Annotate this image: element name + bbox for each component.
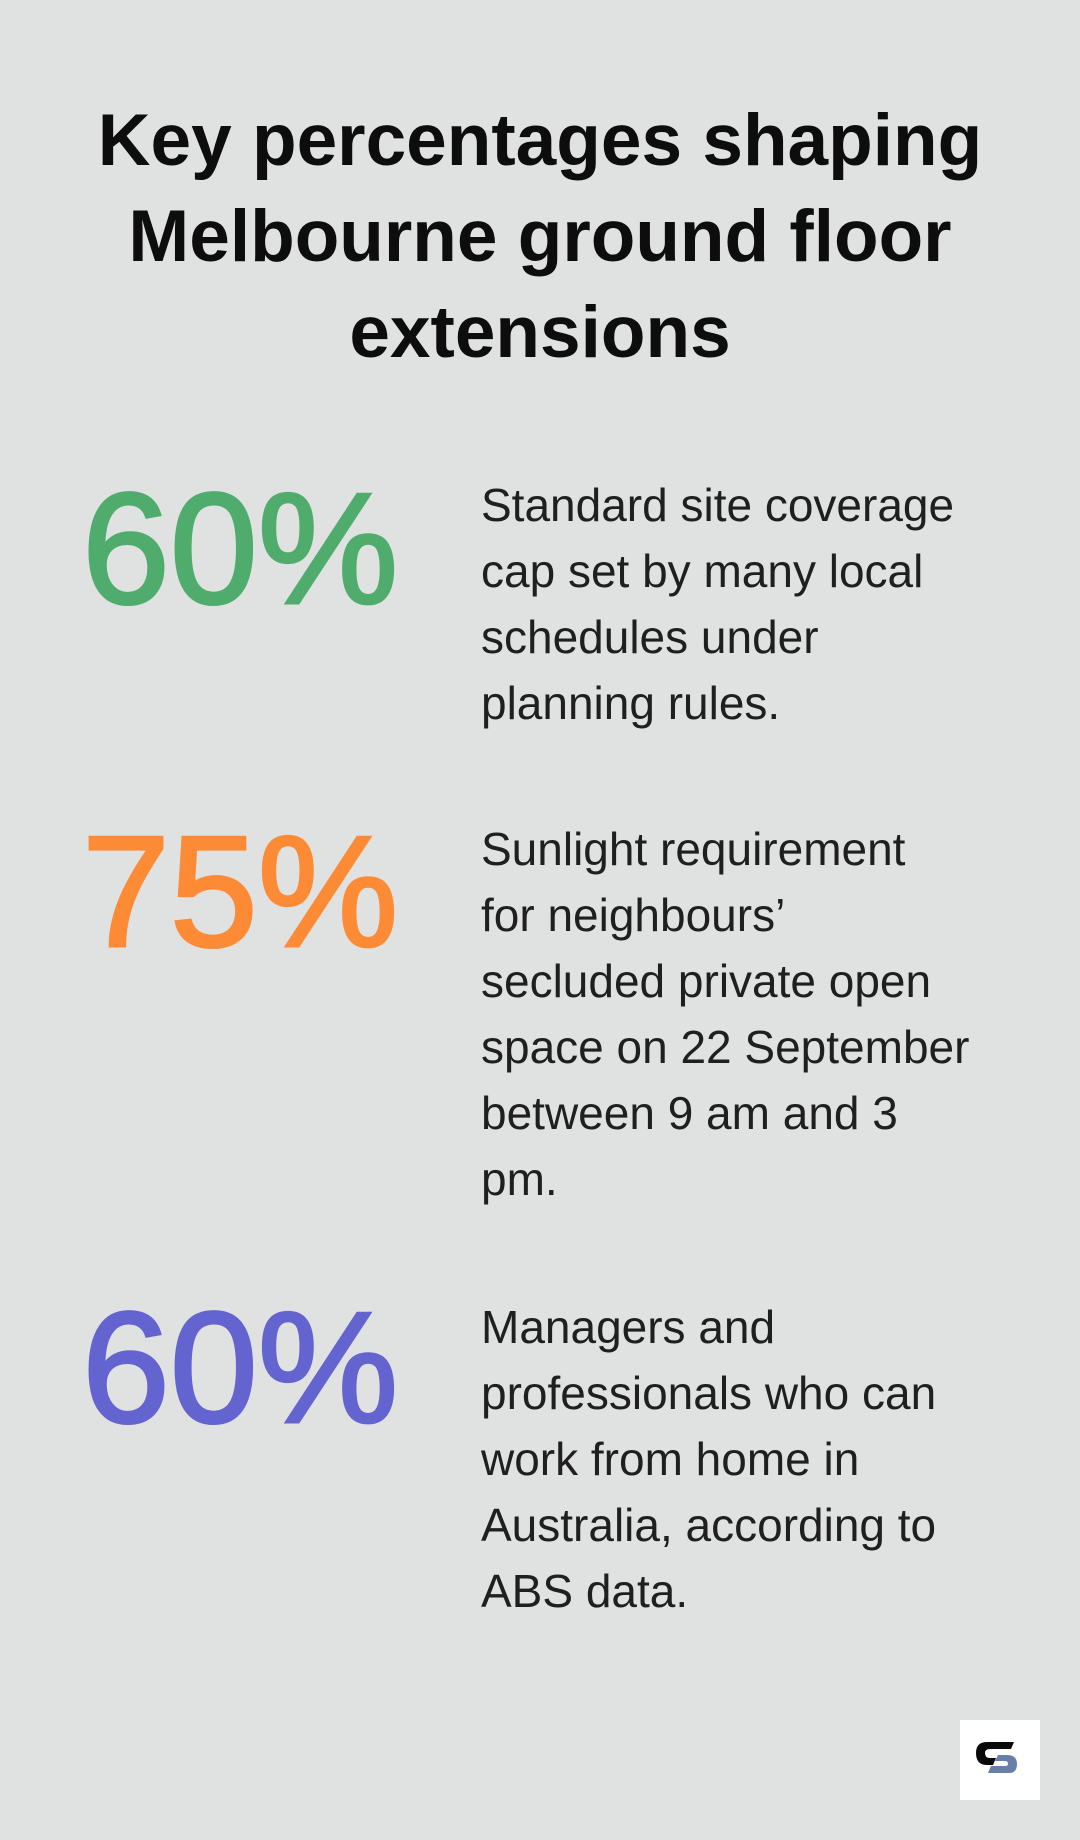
stat 2 text: for neighbours’ [481,889,785,941]
logo [960,1720,1040,1800]
stat 2 text: secluded private open [481,955,931,1007]
stat 1 text: schedules under [481,611,819,663]
stat 3 text [481,1301,936,1617]
stat 3 text: professionals who can [481,1367,936,1419]
stat 1 text: Standard site coverage [481,479,954,531]
stat 2 text: Sunlight requirement [481,823,905,875]
stat 3 text: Australia, according to [481,1499,936,1551]
stat 2 text: pm. [481,1153,558,1205]
stat 3 number: 60% [82,1280,398,1456]
stat 3 text: ABS data. [481,1565,688,1617]
title [98,100,982,373]
stat 1 number: 60% [82,461,398,637]
title: Key percentages shaping [98,100,982,181]
stat 3 text: work from home in [481,1433,859,1485]
stat 2 text: between 9 am and 3 [481,1087,898,1139]
stat 1 text: cap set by many local [481,545,923,597]
stat 3 text: Managers and [481,1301,775,1353]
stat 1 text: planning rules. [481,677,780,729]
title: extensions [349,292,731,373]
stat 2 text [481,823,969,1205]
stat 2 number: 75% [82,804,398,980]
stat 1 text [481,479,954,729]
stat 2 text: space on 22 September [481,1021,969,1073]
title: Melbourne ground floor [128,196,952,277]
